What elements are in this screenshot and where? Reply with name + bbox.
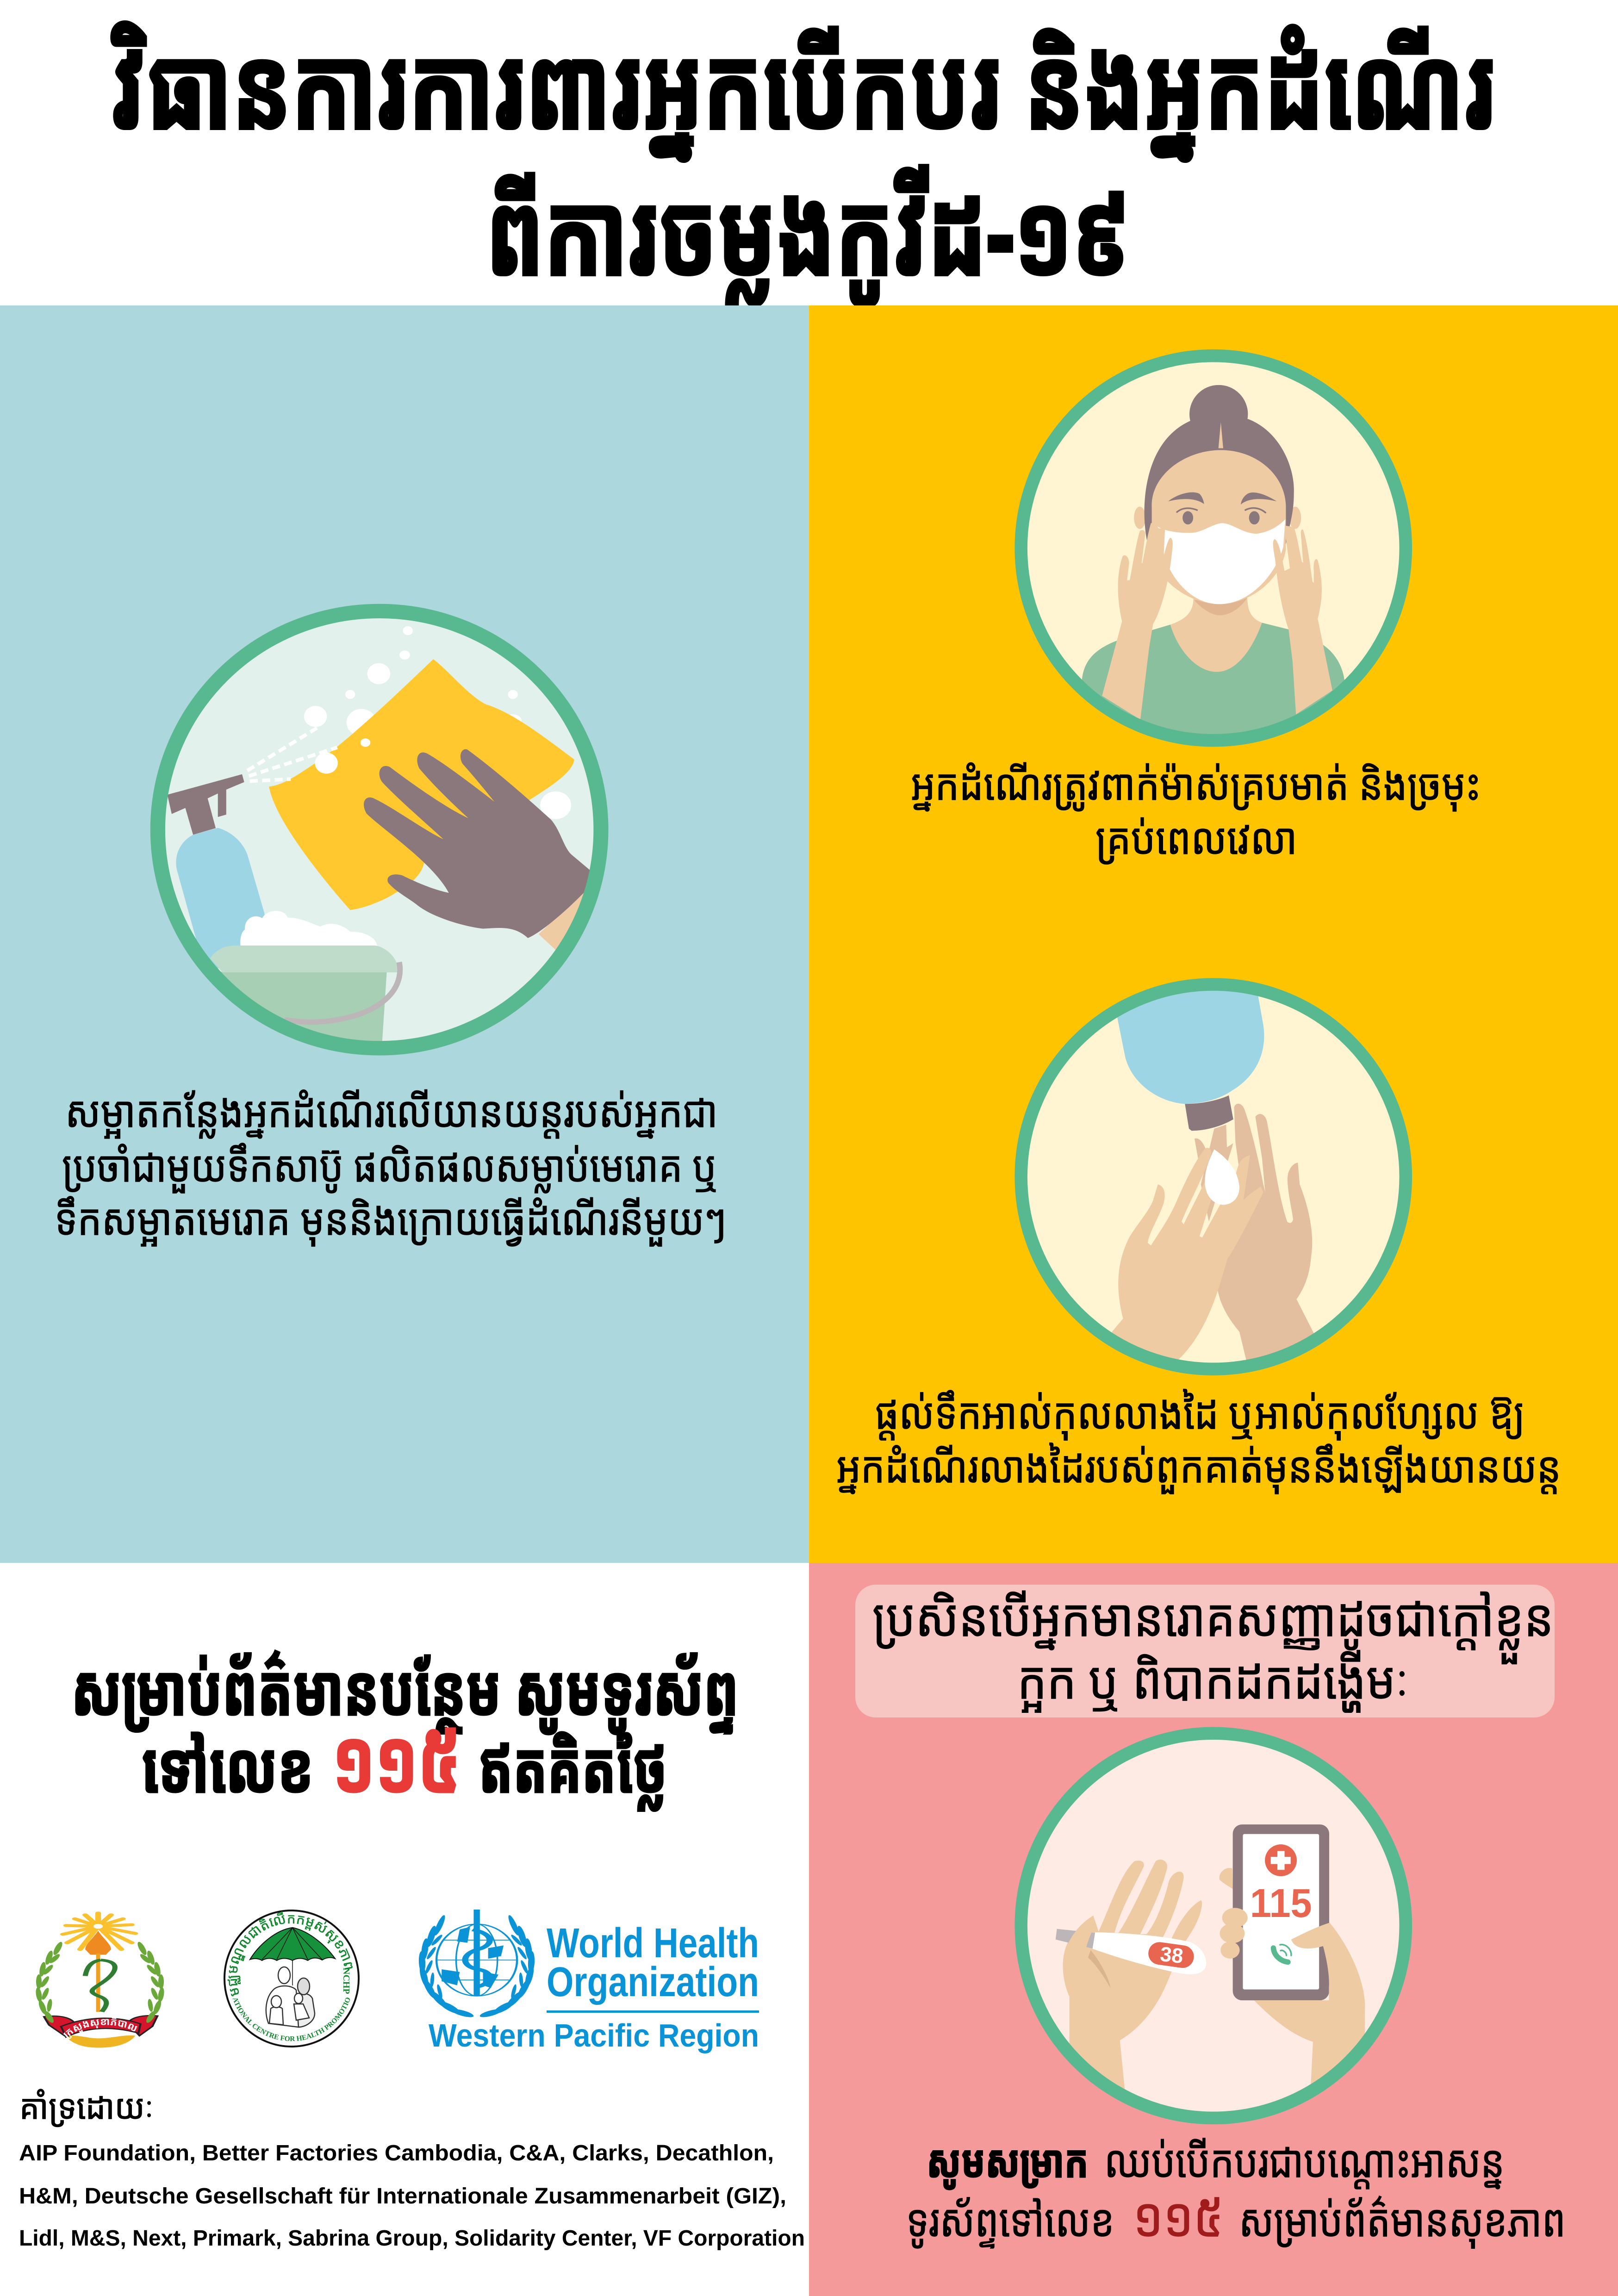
title: [111, 6, 1496, 308]
text: rest and call 115: សម្រាប់ព័ត៌មានសុខភាព: [1239, 2189, 1566, 2250]
logo: National Centre for Health Promotion: NATIONAL CENTRE FOR HEALTH PROMOTION: [0, 0, 352, 2043]
supporters: គាំទ្រដោយៈ: [19, 2084, 154, 2129]
logo: National Centre for Health Promotion: NCHP: [341, 1968, 351, 1994]
panel: symptoms and hotline: [809, 1563, 1618, 2296]
icon: sanitizer bottle over hands: [1021, 984, 1406, 1370]
hotline heading: ១១៥: [332, 1698, 460, 1818]
title: ពីការចម្លងកូវីដ-១៩: [486, 152, 1130, 308]
text: rest and call 115: ទូរស័ព្ទទៅលេខ: [906, 2189, 1114, 2250]
text: provide hand gel: [836, 1383, 1561, 1495]
logo: Ministry of Health: ក្រសួងសុខាភិបាល: [60, 2014, 140, 2041]
icon: thermometer in hand and phone calling 115: 115: [1250, 1881, 1312, 1926]
supporters: [19, 2084, 805, 2251]
logo: World Health Organization wordmark: Western Pacific Region: [429, 2017, 759, 2053]
text: rest and call 115: ១១៥: [1133, 2178, 1224, 2252]
icon: woman putting on a face mask: [1021, 356, 1406, 741]
text: clean passenger area: [55, 1082, 727, 1247]
logo: World Health Organization wordmark: World Health: [547, 1920, 759, 1966]
logo: World Health Organization wordmark: [429, 1920, 759, 2053]
hotline heading: [71, 1641, 739, 1818]
callout: symptoms: ប្រសិនបើអ្នកមានរោគសញ្ញាដូចជាក្តៅខ្លួន: [872, 1580, 1554, 1664]
callout: symptoms: [855, 1580, 1555, 1717]
text: wear a mask: [911, 754, 1481, 866]
text: provide hand gel: ផ្តល់ទឹកអាល់កុលលាងដៃ ឬអាល់កុលហ្សែល ឱ្យ: [875, 1383, 1525, 1441]
text: clean passenger area: ប្រចាំជាមួយទឹកសាប៊ូ ផលិតផលសម្លាប់មេរោគ ឬ: [62, 1136, 718, 1194]
text: rest and call 115: សូមសម្រាក: [927, 2130, 1089, 2190]
text: rest and call 115: ឈប់បើកបរជាបណ្តោះអាសន្ន: [1104, 2130, 1505, 2190]
logo: World Health Organization wordmark: Organization: [547, 1959, 759, 2005]
panel: clean passenger area: [0, 305, 809, 1563]
icon: cleaning hand with cloth, spray and bucket: [158, 611, 601, 1048]
text: rest and call 115: [906, 2130, 1566, 2252]
text: wear a mask: គ្រប់ពេលវេលា: [1095, 809, 1297, 866]
logo: World Health Organization emblem: [418, 1910, 535, 2019]
icon: family figures: [266, 1967, 315, 2027]
text: clean passenger area: ទឹកសម្អាតមេរោគ មុននិងក្រោយធ្វើដំណើរនីមួយៗ: [55, 1189, 727, 1247]
panel: masks and hand gel: [809, 305, 1618, 1563]
hotline heading: ឥតគិតថ្លៃ: [479, 1718, 667, 1812]
logo: Ministry of Health: [35, 1913, 165, 2047]
hotline heading: ទៅលេខ: [142, 1718, 314, 1812]
hotline heading: សម្រាប់ព័ត៌មានបន្ថែម សូមទូរស័ព្ទ: [71, 1641, 739, 1735]
text: wear a mask: អ្នកដំណើរត្រូវពាក់ម៉ាស់គ្របមាត់ និងច្រមុះ: [911, 754, 1481, 812]
logo: National Centre for Health Promotion: មជ្ឈមណ្ឌលជាតិលើកកម្ពស់សុខភាព: [222, 1909, 360, 1998]
callout: symptoms: ក្អក ឬ ពិបាកដកដង្ហើមៈ: [1017, 1643, 1409, 1714]
supporters: H&M, Deutsche Gesellschaft für Internationale Zusammenarbeit (GIZ),: [19, 2184, 786, 2209]
supporters: Lidl, M&S, Next, Primark, Sabrina Group, Solidarity Center, VF Corporation: [19, 2226, 805, 2251]
text: clean passenger area: សម្អាតកន្លែងអ្នកដំណើរលើយានយន្តរបស់អ្នកជា: [65, 1082, 718, 1139]
icon: thermometer in hand and phone calling 115: 38: [1159, 1942, 1184, 1968]
supporters: AIP Foundation, Better Factories Cambodia, C&A, Clarks, Decathlon,: [19, 2141, 774, 2165]
icon: thermometer in hand and phone calling 115: [1021, 1733, 1406, 2118]
icon: umbrella: [250, 1928, 335, 1985]
